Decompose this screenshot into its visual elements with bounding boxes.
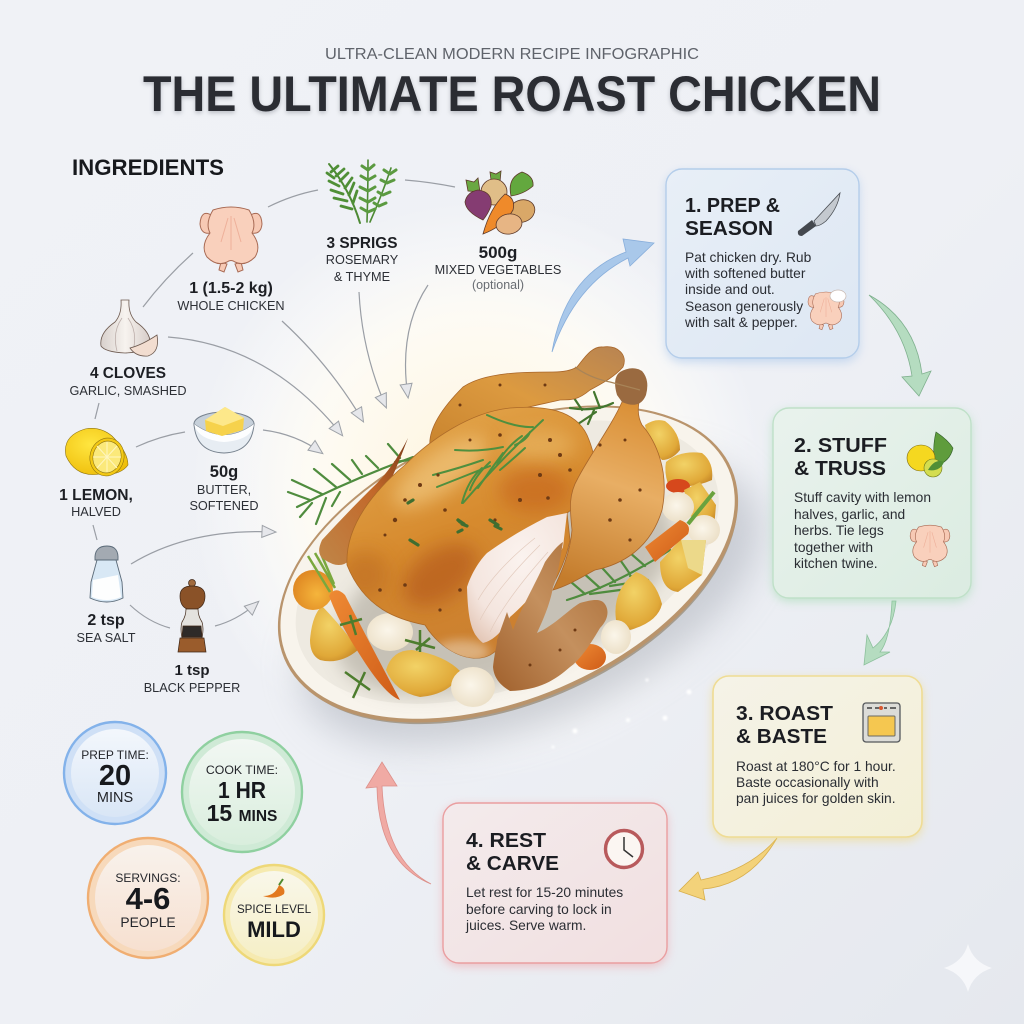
icon: vegetables xyxy=(465,171,538,236)
step 1 text: Pat chicken dry. Rub xyxy=(685,250,812,265)
badge: prep time: MINS xyxy=(97,790,133,806)
badge: spice level: MILD xyxy=(247,917,301,942)
text: rosemary: 3 SPRIGS xyxy=(326,235,398,252)
badge: cook time: COOK TIME: xyxy=(206,763,278,777)
text: butter xyxy=(189,463,259,513)
wing xyxy=(493,542,607,691)
step 2 text: kitchen twine. xyxy=(794,556,878,571)
step 3 text: Roast at 180°C for 1 hour. xyxy=(736,759,896,774)
chicken shadow on platter xyxy=(306,441,704,739)
icon: salt shaker xyxy=(90,546,123,602)
step 3 text: Baste occasionally with xyxy=(736,775,879,790)
badge: spice level xyxy=(224,865,324,965)
step 1 text: Season generously xyxy=(685,299,803,314)
text: rosemary xyxy=(326,235,399,284)
text: whole chicken xyxy=(177,280,285,313)
arrow: to step 1 xyxy=(552,239,654,352)
text: lemon: 1 LEMON, xyxy=(59,487,133,504)
icon: chili xyxy=(263,879,284,898)
icon: trussed chicken xyxy=(910,525,950,567)
step 4 text: Let rest for 15-20 minutes xyxy=(466,885,623,900)
badge: prep time xyxy=(64,722,166,824)
step 1 text: inside and out. xyxy=(685,282,775,297)
panel: step 3 xyxy=(713,676,922,840)
badge: prep time: 20 xyxy=(99,760,131,792)
badge: cook time: 15 MINS xyxy=(207,800,277,826)
icon: knife xyxy=(798,193,840,236)
icon: oven xyxy=(863,703,900,742)
rosemary on chicken xyxy=(433,415,543,503)
text: lemon: HALVED xyxy=(71,505,121,519)
badge: prep time: PREP TIME: xyxy=(81,748,149,762)
text: salt: 2 tsp xyxy=(87,612,125,629)
step 1 text: with salt & pepper. xyxy=(684,315,798,330)
step 1 text xyxy=(684,250,812,330)
step 2 text: Stuff cavity with lemon xyxy=(794,490,931,505)
panel: step 3: & BASTE xyxy=(736,725,827,748)
text: garlic: 4 CLOVES xyxy=(90,365,166,382)
badge: servings: SERVINGS: xyxy=(115,871,181,885)
step 3 text xyxy=(736,759,896,806)
icon: butter xyxy=(194,407,254,453)
text: salt xyxy=(76,612,136,645)
panel: step 2: 2. STUFF xyxy=(794,434,887,457)
arrow: step 2 to 3 xyxy=(864,601,896,665)
badge: cook time xyxy=(182,732,302,852)
meat grain xyxy=(478,538,548,632)
panel: step 2: & TRUSS xyxy=(794,457,886,480)
panel: step 2 xyxy=(773,408,971,601)
step 2 text xyxy=(794,490,931,571)
carved breast xyxy=(467,513,567,643)
text: garlic: GARLIC, SMASHED xyxy=(69,384,187,398)
glow sparkles xyxy=(552,678,692,748)
panel: step 4: 4. REST xyxy=(466,829,546,852)
panel: step 1: SEASON xyxy=(685,217,773,240)
text: vegetables: MIXED VEGETABLES xyxy=(435,263,561,277)
badge: servings: 4-6 xyxy=(126,881,170,916)
panel: step 1 xyxy=(666,169,859,362)
text: vegetables: 500g xyxy=(479,243,517,262)
text: rosemary: & THYME xyxy=(334,270,390,284)
ingredient connector arrows xyxy=(93,180,455,628)
text: butter: SOFTENED xyxy=(189,499,259,513)
text: garlic xyxy=(69,365,187,398)
decorative sparkle xyxy=(944,944,992,992)
badge: servings xyxy=(88,838,208,958)
icon: garlic xyxy=(101,300,158,356)
text: pepper: BLACK PEPPER xyxy=(144,681,240,695)
skin shading xyxy=(341,424,576,664)
badge: spice level: SPICE LEVEL xyxy=(237,903,312,916)
hero glow xyxy=(190,200,770,780)
ingredients heading: INGREDIENTS xyxy=(72,155,224,180)
text: whole chicken: 1 (1.5-2 kg) xyxy=(189,280,273,297)
icon: pepper mill xyxy=(178,580,206,652)
chicken body xyxy=(347,407,595,658)
step 2 text: herbs. Tie legs xyxy=(794,523,884,538)
icon: lemon xyxy=(65,428,128,480)
arrow: step 4 to hero xyxy=(366,762,431,884)
badge: servings: PEOPLE xyxy=(120,915,176,930)
step 3 text: pan juices for golden skin. xyxy=(736,791,896,806)
herbs behind xyxy=(288,392,670,600)
badge: cook time: 1 HR xyxy=(218,777,266,803)
panel: step 4: & CARVE xyxy=(466,852,559,875)
panel: step 1: 1. PREP & xyxy=(685,194,780,217)
tail wing xyxy=(319,438,408,565)
text: butter: BUTTER, xyxy=(197,483,251,497)
text: salt: SEA SALT xyxy=(76,631,136,645)
icon: clock xyxy=(606,830,642,868)
step 2 text: together with xyxy=(794,540,873,555)
arrow: step 1 to 2 xyxy=(869,295,931,396)
icon: whole chicken xyxy=(200,207,262,272)
text: pepper: 1 tsp xyxy=(174,662,210,679)
step 1 text: with softened butter xyxy=(684,266,806,281)
step 4 text xyxy=(465,885,623,933)
text: vegetables xyxy=(435,243,561,292)
panel: step 4 xyxy=(443,803,667,966)
step 4 text: before carving to lock in xyxy=(466,902,612,917)
back leg xyxy=(430,347,624,447)
step 2 text: halves, garlic, and xyxy=(794,507,905,522)
title: THE ULTIMATE ROAST CHICKEN xyxy=(143,66,881,122)
text: vegetables: (optional) xyxy=(472,278,524,292)
panel: step 3: 3. ROAST xyxy=(736,702,833,725)
vegetables xyxy=(293,420,720,707)
step 4 text: juices. Serve warm. xyxy=(465,918,586,933)
leg bone tips and twine xyxy=(575,367,647,405)
icon: chicken with butter xyxy=(808,290,846,330)
platter xyxy=(230,342,786,788)
text: butter: 50g xyxy=(210,463,238,481)
icon: lemon and herbs xyxy=(907,432,953,477)
arrow: step 3 to 4 xyxy=(679,838,777,900)
text: lemon xyxy=(59,487,133,519)
icon: rosemary and thyme xyxy=(327,160,396,223)
text: pepper xyxy=(144,662,240,695)
herb flecks xyxy=(408,500,501,545)
subtitle: ULTRA-CLEAN MODERN RECIPE INFOGRAPHIC xyxy=(325,46,699,63)
front leg xyxy=(553,395,664,590)
text: whole chicken: WHOLE CHICKEN xyxy=(177,299,285,313)
skin speckles xyxy=(378,384,642,666)
hero: roast chicken on platter xyxy=(278,346,770,760)
text: rosemary: ROSEMARY xyxy=(326,253,399,267)
